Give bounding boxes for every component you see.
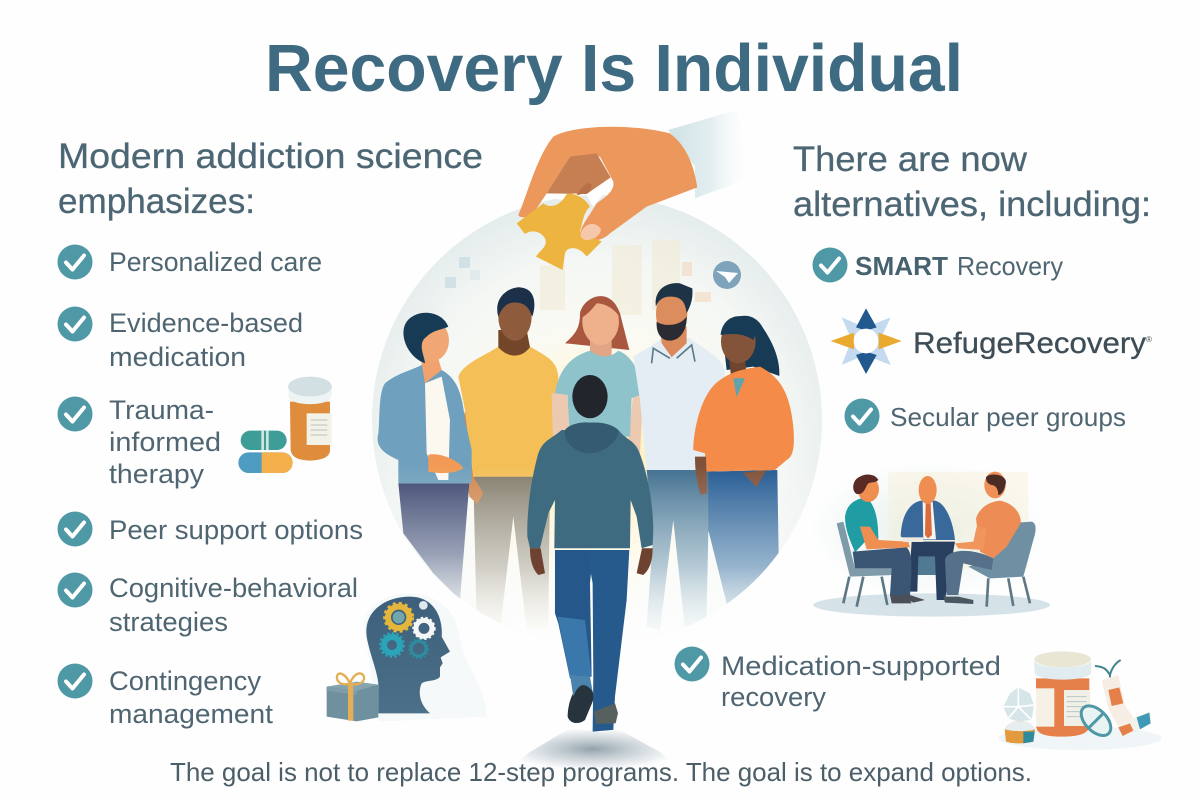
- person: woman in orange shirt: [693, 316, 794, 610]
- fade at the base of circle: [372, 195, 822, 645]
- item: personalized care: Personalized care: [109, 247, 322, 277]
- logo: Refuge Recovery: RefugeRecovery: [913, 327, 1146, 360]
- item: evidence-based medication: [58, 306, 303, 372]
- title: Recovery Is Individual: [265, 31, 963, 106]
- item: peer support options: Peer support options: [109, 515, 363, 545]
- item: trauma-informed therapy: [58, 395, 221, 489]
- footer statement: The goal is not to replace 12-step programs. The goal is to expand options.: [170, 757, 1032, 787]
- item: contingency management: management: [109, 699, 274, 729]
- heading: left: [58, 137, 483, 221]
- icon: pill bottle and capsules: [238, 377, 332, 473]
- item: contingency management: Contingency: [109, 666, 261, 696]
- item: trauma-informed therapy: therapy: [109, 459, 205, 489]
- item: personalized care: [58, 244, 322, 280]
- person: man in yellow shirt: [458, 287, 558, 630]
- panel: alternatives: [674, 140, 1162, 750]
- item: trauma-informed therapy: informed: [109, 427, 221, 457]
- floor shadow: [505, 728, 680, 770]
- glow: [465, 335, 715, 605]
- panel: modern addiction science emphasizes: [58, 137, 483, 729]
- background city blocks: [445, 240, 711, 315]
- item: cognitive-behavioral strategies: Cognitive-behavioral: [109, 573, 358, 603]
- item: medication-supported recovery: recovery: [721, 682, 827, 712]
- heading: right: [793, 140, 1151, 224]
- seated woman: [845, 497, 878, 552]
- icon: head with gears and gift box: [327, 593, 487, 722]
- chair right: [968, 522, 1036, 578]
- heading: left: Modern addiction science: [58, 137, 483, 176]
- item: SMART Recovery: [812, 248, 1063, 282]
- item: secular peer groups: Secular peer groups: [890, 402, 1126, 432]
- person: walking figure from behind: [527, 375, 653, 732]
- item: cognitive-behavioral strategies: strategies: [109, 607, 228, 637]
- central illustration: circle with group: [372, 195, 822, 770]
- item: medication-supported recovery: Medication-supported: [721, 651, 1001, 681]
- item: evidence-based medication: medication: [109, 342, 246, 372]
- item: peer support options: [58, 512, 363, 546]
- person: woman in blue blazer: [378, 313, 472, 600]
- heading: right: There are now: [793, 140, 1028, 179]
- item: evidence-based medication: Evidence-based: [109, 308, 303, 338]
- icon: medication bottle, pills and dropper: [998, 651, 1162, 750]
- small speech icon: [713, 261, 741, 289]
- item: cognitive-behavioral strategies: [58, 572, 358, 637]
- item: medication-supported recovery: [674, 646, 1001, 712]
- item: SMART Recovery: SMART: [855, 251, 948, 281]
- person: man in striped shirt: [633, 283, 725, 630]
- person: woman in teal shirt: [552, 296, 644, 453]
- seated man: [976, 501, 1021, 558]
- center person: [917, 557, 942, 575]
- item: SMART Recovery: Recovery: [957, 251, 1063, 281]
- heading: right: alternatives, including:: [793, 185, 1151, 224]
- icon: hand with puzzle piece: [517, 110, 753, 270]
- logo: Refuge Recovery: [831, 308, 1152, 374]
- illustration: group meeting: [807, 460, 1050, 617]
- group of five people: [378, 283, 794, 630]
- item: trauma-informed therapy: Trauma-: [109, 395, 214, 425]
- item: contingency management: [58, 664, 274, 729]
- logo: Refuge Recovery: ®: [1146, 335, 1152, 344]
- heading: left: emphasizes:: [58, 182, 255, 221]
- chair left: [837, 522, 893, 577]
